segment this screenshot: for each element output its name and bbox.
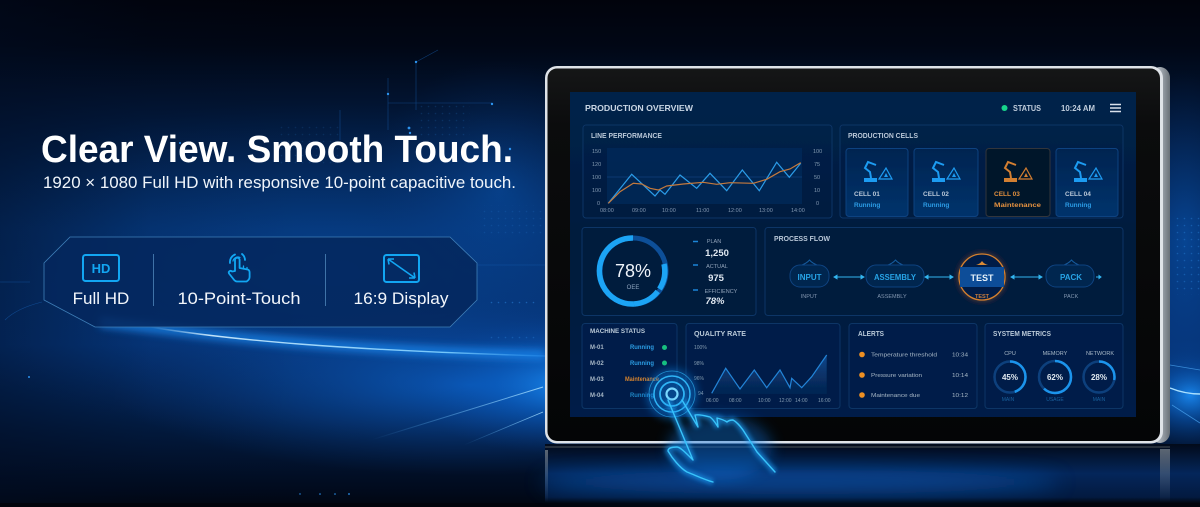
panel: line performance: 13:00 <box>759 208 773 214</box>
OEE ring: 78% <box>615 261 651 281</box>
touch hand illustration <box>646 368 775 482</box>
panel: line performance <box>583 125 832 218</box>
panel: line performance: 100 <box>592 175 601 181</box>
step: input: INPUT <box>798 273 822 282</box>
panel: alerts: Maintenance due <box>871 393 920 399</box>
cell 1 <box>846 148 908 216</box>
hand outline <box>668 400 775 482</box>
panel: quality rate: 06:00 <box>706 398 719 404</box>
cell 4: Running <box>1065 202 1091 209</box>
feature: 10-Point-Touch: 10-Point-Touch <box>178 289 300 308</box>
panel: line performance: 10 <box>814 188 820 194</box>
chart lines <box>608 162 801 203</box>
OEE ring: OEE <box>627 285 639 291</box>
panel: machine status: M-02 <box>590 361 604 367</box>
panel: machine status: M-03 <box>590 377 604 383</box>
gauge: CPU: MAIN <box>1002 397 1015 403</box>
arrow <box>1096 276 1101 278</box>
cell 2: Running <box>923 202 949 209</box>
touch ripple rings <box>649 371 695 417</box>
gauge: CPU: CPU <box>1004 351 1016 357</box>
feature: Full HD <box>73 255 129 308</box>
panel: line performance: 12:00 <box>728 208 742 214</box>
background: curved light streak and floor rays <box>0 322 1200 445</box>
panel: quality rate: 10:00 <box>758 398 771 404</box>
tablet reflection <box>540 444 1200 503</box>
panel: quality rate: 98% <box>694 361 705 367</box>
panel: alerts: ALERTS <box>858 331 884 338</box>
cell 2: CELL 02 <box>923 191 949 198</box>
gauge: CPU <box>994 351 1026 403</box>
step: test (active): TEST <box>970 273 994 283</box>
panel: machine status <box>582 324 677 408</box>
step: assembly: ASSEMBLY <box>874 273 917 282</box>
screen <box>570 92 1136 417</box>
panel: alerts <box>849 324 977 408</box>
cell 3: maintenance <box>986 148 1050 216</box>
cell 3: maintenance: CELL 03 <box>994 191 1020 198</box>
step: assembly: ASSEMBLY <box>877 294 907 300</box>
panel: OEE gauge <box>582 228 756 316</box>
cell 2 <box>914 148 978 216</box>
cell 1: CELL 01 <box>854 191 880 198</box>
panel: production cells: PRODUCTION CELLS <box>848 133 918 140</box>
OEE stats: 78% <box>705 296 725 307</box>
OEE stats <box>693 239 738 307</box>
panel: line performance: 09:00 <box>632 208 646 214</box>
panel: line performance: 0 <box>597 201 600 207</box>
panel: machine status: Running <box>630 393 654 399</box>
panel: line performance: LINE PERFORMANCE <box>591 133 662 140</box>
step: pack <box>1046 260 1094 300</box>
OEE ring <box>599 238 666 304</box>
OEE stats: PLAN <box>707 239 721 245</box>
panel: quality rate: 08:00 <box>729 398 742 404</box>
panel: line performance: 08:00 <box>600 208 614 214</box>
gauge: memory: MEMORY <box>1043 351 1068 357</box>
screen header: STATUS <box>1013 103 1041 113</box>
panel: quality rate: 100% <box>694 345 707 351</box>
OEE stats: ACTUAL <box>706 264 728 270</box>
panel: alerts: 10:14 <box>952 373 968 379</box>
hand outline glow <box>668 400 775 482</box>
step: input <box>790 260 829 300</box>
panel: machine status: MACHINE STATUS <box>590 329 645 335</box>
gauge: network: NETWORK <box>1086 351 1114 357</box>
gauge: network: MAIN <box>1093 397 1106 403</box>
screen header: PRODUCTION OVERVIEW <box>585 103 694 113</box>
feature: 16:9 Display <box>354 255 449 308</box>
panel: production cells <box>840 125 1123 218</box>
panel: line performance: 120 <box>592 162 601 168</box>
panel: line performance: 14:00 <box>791 208 805 214</box>
feature: 10-Point-Touch <box>178 254 300 308</box>
subtitle: 1920 × 1080 Full HD with responsive 10-point capacitive touch. <box>43 174 516 192</box>
panel: line performance: 11:00 <box>696 208 709 214</box>
panel: machine status: M-04 <box>590 393 604 399</box>
panel: machine status: Running <box>630 345 654 351</box>
panel: quality rate: 16:00 <box>818 398 831 404</box>
panel: line performance: 0 <box>816 201 819 207</box>
title: Clear View. Smooth Touch. <box>41 129 513 171</box>
cell 4: CELL 04 <box>1065 191 1091 198</box>
OEE stats: 975 <box>708 273 725 284</box>
panel: line performance: 50 <box>814 175 820 181</box>
arrow <box>1011 275 1042 279</box>
step: test (active) <box>957 252 1007 302</box>
cell 3: maintenance: Maintenance <box>994 202 1041 209</box>
panel: alerts: Temperature threshold <box>871 352 937 358</box>
panel: machine status: Running <box>630 361 654 367</box>
OEE stats: 1,250 <box>705 248 729 259</box>
panel: line performance: 75 <box>814 162 820 168</box>
gauge: memory: USAGE <box>1046 397 1064 403</box>
panel: quality rate: 14:00 <box>795 398 808 404</box>
gauge: network <box>1084 351 1114 403</box>
OEE stats: EFFICIENCY <box>705 289 738 295</box>
arrow <box>834 275 864 279</box>
panel: quality rate: 96% <box>694 376 705 382</box>
tablet frame <box>545 66 1170 444</box>
panel: feature badges <box>44 237 477 327</box>
panel: line performance: 100 <box>592 188 601 194</box>
step: pack: PACK <box>1064 294 1079 300</box>
panel: alerts: Pressure variation <box>871 373 922 379</box>
panel: line performance: 100 <box>813 149 822 155</box>
panel: line performance: 150 <box>592 149 601 155</box>
tablet device <box>545 66 1170 444</box>
step: assembly <box>866 260 924 300</box>
panel: system metrics <box>985 324 1123 408</box>
panel: system metrics: SYSTEM METRICS <box>993 331 1051 338</box>
panel: alerts: 10:12 <box>952 393 968 399</box>
panel: process flow <box>765 228 1123 316</box>
step: test (active): TEST <box>975 294 990 300</box>
step: pack: PACK <box>1060 273 1082 282</box>
panel: alerts: 10:34 <box>952 352 968 358</box>
panel: machine status: Maintenance <box>625 377 660 383</box>
panel: quality rate: QUALITY RATE <box>694 331 746 338</box>
arrow <box>925 275 953 279</box>
panel: machine status: M-01 <box>590 345 604 351</box>
cell 1: Running <box>854 202 880 209</box>
panel: quality rate: 94 <box>698 391 704 397</box>
panel: quality rate: 12:00 <box>779 398 792 404</box>
feature: Full HD: HD <box>92 261 110 276</box>
panel: quality rate <box>686 324 840 408</box>
cell 4 <box>1056 148 1118 216</box>
gauge: memory: 62% <box>1047 373 1063 382</box>
screen header <box>585 103 1121 113</box>
screen header: 10:24 AM <box>1061 103 1095 113</box>
feature: Full HD: Full HD <box>73 289 129 308</box>
gauge: network: 28% <box>1091 373 1107 382</box>
gauge: CPU: 45% <box>1002 373 1018 382</box>
feature: 16:9 Display: 16:9 Display <box>354 289 449 308</box>
gauge: memory <box>1039 351 1071 403</box>
panel: process flow: PROCESS FLOW <box>774 234 831 243</box>
step: input: INPUT <box>801 294 818 300</box>
panel: line performance: 10:00 <box>662 208 676 214</box>
